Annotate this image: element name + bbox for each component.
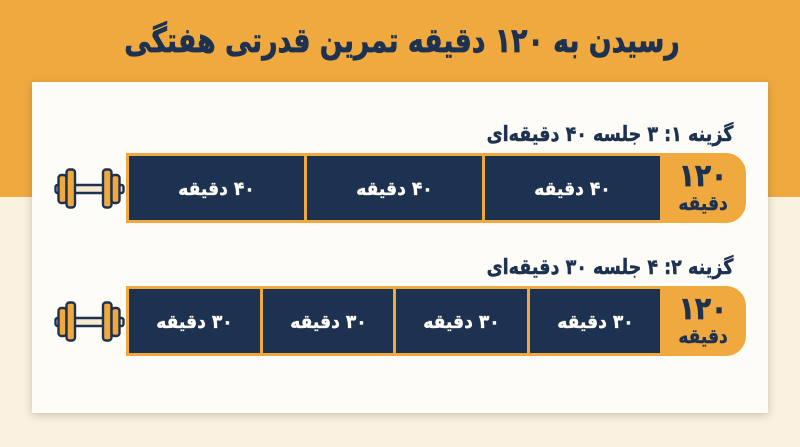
total 120: ۱۲۰ [679, 291, 727, 327]
orange header background [0, 0, 800, 197]
total minutes label: دقیقه [678, 324, 728, 348]
segment 40 minutes [307, 156, 482, 220]
segment 40 minutes [129, 156, 304, 220]
icon: dumbbell [54, 301, 125, 342]
segment 30 minutes: ۳۰ دقیقه [156, 311, 233, 333]
segment 30 minutes [396, 289, 527, 353]
segment 40 minutes [485, 156, 660, 220]
segment 30 minutes: ۳۰ دقیقه [557, 311, 633, 333]
option 2 heading: گزینه ۲: ۴ جلسه ۳۰ دقیقه‌ای [487, 255, 733, 279]
option 2 bar [126, 286, 746, 356]
segment 30 minutes [129, 289, 260, 353]
segment 40 minutes: ۴۰ دقیقه [534, 178, 611, 200]
total minutes label: دقیقه [678, 191, 728, 215]
option 1 heading: گزینه ۱: ۳ جلسه ۴۰ دقیقه‌ای [487, 122, 733, 146]
segment 40 minutes: ۴۰ دقیقه [356, 178, 433, 200]
option 1 bar [126, 153, 746, 223]
total 120: ۱۲۰ [679, 158, 727, 194]
main panel [32, 82, 768, 413]
icon: dumbbell [54, 168, 125, 209]
segment 30 minutes [530, 289, 660, 353]
title: رسیدن به ۱۲۰ دقیقه تمرین قدرتی هفتگی [124, 21, 680, 61]
segment 40 minutes: ۴۰ دقیقه [178, 178, 255, 200]
segment 30 minutes: ۳۰ دقیقه [290, 311, 366, 333]
segment 30 minutes [263, 289, 393, 353]
segment 30 minutes: ۳۰ دقیقه [423, 311, 500, 333]
